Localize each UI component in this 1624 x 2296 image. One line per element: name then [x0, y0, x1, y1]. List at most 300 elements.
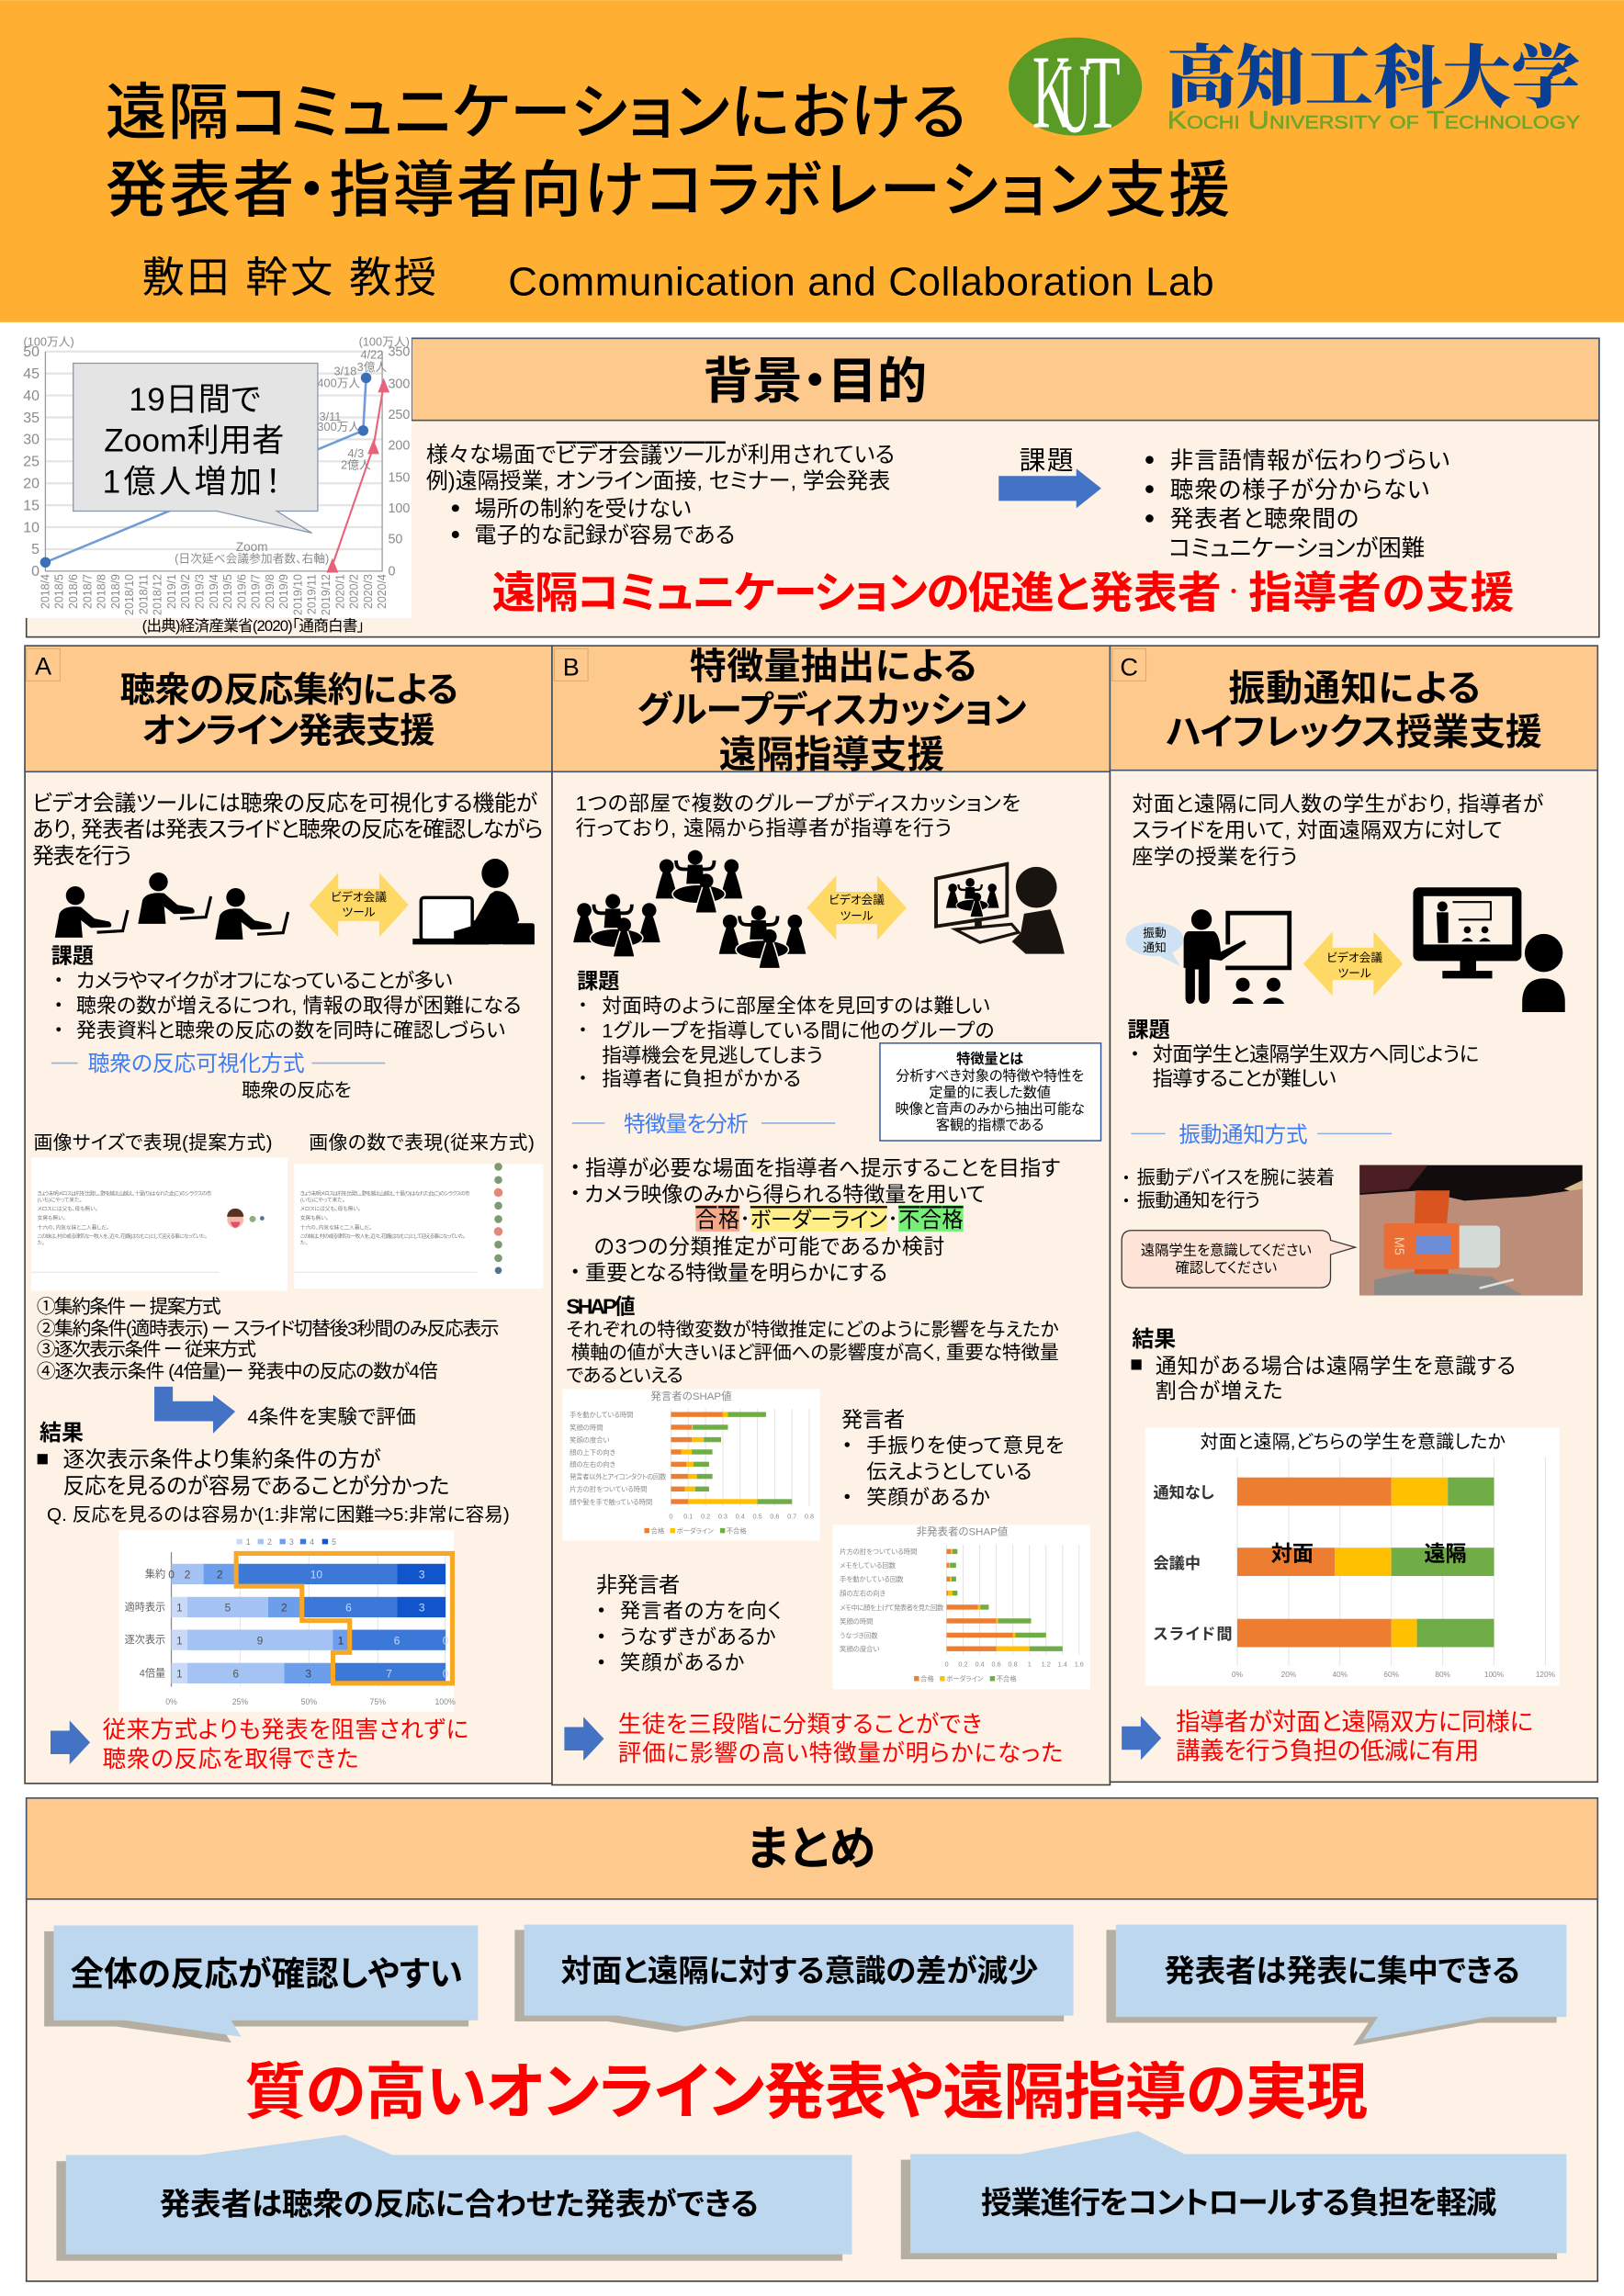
- chart: ease of seeing reactions: 0: [443, 1667, 449, 1680]
- method C: 振動通知を行う: [1137, 1190, 1260, 1211]
- intro B: [576, 792, 1021, 839]
- chart: Zoom usage: 2019/6: [235, 574, 248, 609]
- heading B: グループディスカッション: [637, 690, 1027, 731]
- chart: Zoom usage: 4/3: [348, 446, 364, 460]
- photo: vibration device on wrist: M5: [1391, 1237, 1405, 1255]
- chart: speaker SHAP: 片方の肘をついている時間: [570, 1485, 647, 1493]
- chart: Zoom usage: 2019/12: [320, 574, 333, 615]
- chart: Zoom usage: 300: [388, 377, 410, 392]
- issues B: 対面時のように部屋全体を見回すのは難しい: [602, 994, 990, 1017]
- callout: reduce burden: 授業進行をコントロールする負担を軽減: [981, 2187, 1497, 2221]
- chart: ease of seeing reactions: 4: [310, 1537, 314, 1547]
- chart: non-speaker SHAP: 顔の左右の向き: [840, 1590, 885, 1598]
- aims B: カメラ映像のみから得られる特徴量を用いて: [584, 1182, 986, 1206]
- issues C: 指導することが難しい: [1153, 1067, 1336, 1090]
- chart: ease of seeing reactions: 3: [419, 1602, 425, 1615]
- chart: ease of seeing reactions: 3: [419, 1569, 425, 1581]
- arrow: issues: 課題: [1020, 446, 1074, 476]
- slide: proposed: 女房も無い。: [38, 1214, 65, 1221]
- sub-heading: vibration notification: 振動通知方式: [1179, 1123, 1308, 1147]
- heading C: ハイフレックス授業支援: [1166, 713, 1542, 753]
- chart: Zoom usage: 2億人: [341, 458, 371, 472]
- callout: Zoom users increase: 19日間で: [129, 382, 261, 418]
- chart: ease of seeing reactions: 1: [176, 1667, 183, 1680]
- conclusion A: 従来方式よりも発表を阻害されずに: [103, 1717, 468, 1743]
- icons: audience at laptops: [55, 872, 288, 940]
- issues A: カメラやマイクがオフになっていることが多い: [76, 969, 453, 992]
- chart: Zoom usage: (100万人): [24, 335, 74, 349]
- non-speakers list: 笑顔があるか: [620, 1651, 744, 1674]
- chart: ease of seeing reactions: 6: [345, 1602, 352, 1615]
- text block: video conferencing usage: [426, 443, 895, 548]
- classes highlight: [695, 1205, 964, 1232]
- icon: presenter with laptop: [412, 859, 535, 944]
- chart: Zoom usage: 200: [388, 438, 410, 453]
- chart source: (出典)経済産業省(2020)「通商白書」: [142, 617, 365, 635]
- non-speakers list: 非発言者: [596, 1572, 680, 1596]
- chart: awareness: 0%: [1232, 1671, 1244, 1679]
- chart: Zoom usage: Zoom: [236, 540, 268, 554]
- icon: vibration bubble: 振動: [1143, 926, 1167, 940]
- slide: proposed: [31, 1158, 288, 1291]
- classes highlight: 不合格: [898, 1208, 964, 1232]
- callout: Zoom users increase: [73, 363, 318, 533]
- chart: speaker SHAP: [563, 1390, 820, 1541]
- chart: speaker SHAP: 0.6: [770, 1512, 779, 1520]
- photo: vibration device on wrist: [1359, 1165, 1583, 1295]
- definition box: features: 客観的指標である: [936, 1118, 1044, 1133]
- chart: non-speaker SHAP: 1.6: [1075, 1660, 1084, 1669]
- goal statement: ･: [1228, 580, 1239, 605]
- issues B: 指導機会を見逃してしまう: [602, 1044, 823, 1067]
- chart: speaker SHAP: 0.3: [718, 1512, 727, 1520]
- chart: awareness: 60%: [1383, 1671, 1400, 1679]
- chart: non-speaker SHAP: 非発表者のSHAP値: [917, 1525, 1009, 1537]
- chart: ease of seeing reactions: 1: [176, 1634, 183, 1647]
- heading B: [637, 647, 1027, 776]
- icon: vibration bubble: [1125, 922, 1184, 966]
- icon: video tool arrow: [806, 875, 907, 940]
- conclusion A: [51, 1717, 468, 1773]
- intro B: 行っており, 遠隔から指導者が指導を行う: [576, 816, 952, 839]
- chart: Zoom usage: 2019/4: [208, 574, 220, 609]
- arrow: experiment: [154, 1387, 235, 1434]
- chart: awareness: [1145, 1427, 1560, 1685]
- conditions list: ②集約条件(適時表示) ー スライド切替後3秒間のみ反応表示: [37, 1319, 500, 1340]
- chart: Zoom usage: 250: [388, 408, 410, 422]
- callout: Zoom users increase: 1億人増加！: [103, 464, 281, 500]
- chart: Zoom usage: 2020/2: [347, 574, 360, 609]
- results A: [38, 1421, 510, 1525]
- aims B: 重要となる特徴量を明らかにする: [585, 1260, 887, 1284]
- SHAP description: それぞれの特徴変数が特徴推定にどのように影響を与えたか: [566, 1319, 1059, 1340]
- heading B: 遠隔指導支援: [719, 734, 944, 776]
- conclusion A: 聴衆の反応を取得できた: [103, 1747, 359, 1773]
- key message: 質の高いオンライン発表や遠隔指導の実現: [244, 2058, 1368, 2127]
- goal statement: 遠隔コミュニケーションの促進と: [492, 569, 1089, 618]
- callout: presenter focus: 発表者は発表に集中できる: [1164, 1955, 1520, 1989]
- goal statement: 指導者の支援: [1248, 569, 1514, 618]
- classes highlight: 合格: [695, 1208, 739, 1232]
- definition box: features: [880, 1043, 1101, 1141]
- chart: ease of seeing reactions: 100%: [434, 1697, 456, 1706]
- caption: conventional method: 画像の数で表現(従来方式): [309, 1132, 535, 1154]
- goal statement: [492, 569, 1514, 618]
- chart: speaker SHAP: 発言者のSHAP値: [650, 1390, 732, 1402]
- chart: Zoom usage: (日次延べ会議参加者数、右軸): [175, 552, 329, 566]
- chart: Zoom usage: 2019/7: [250, 574, 263, 609]
- chart: speaker SHAP: ボーダライン: [677, 1526, 714, 1535]
- label C: C: [1120, 653, 1138, 681]
- heading B: 特徴量抽出による: [690, 647, 976, 687]
- arrow: issues: [998, 446, 1101, 508]
- intro C: 対面と遠隔に同人数の学生がおり, 指導者が: [1132, 792, 1544, 816]
- chart: ease of seeing reactions: 1: [338, 1634, 344, 1647]
- chart: Zoom usage: 40: [23, 388, 39, 404]
- chart: Zoom usage: 3/18: [333, 365, 356, 378]
- results C: 通知がある場合は遠隔学生を意識する: [1156, 1354, 1516, 1378]
- chart: non-speaker SHAP: 手を動かしている回数: [840, 1575, 904, 1583]
- chart: ease of seeing reactions: 6: [394, 1634, 400, 1647]
- chart: ease of seeing reactions: 0: [443, 1634, 449, 1647]
- callout: presenter focus: [1106, 1925, 1566, 2045]
- chart: non-speaker SHAP: メモをしている回数: [840, 1561, 897, 1570]
- chart: ease of seeing reactions: 逐次表示: [125, 1634, 165, 1646]
- non-speakers list: うなずきがあるか: [620, 1626, 776, 1649]
- chart: Zoom usage: 2018/5: [53, 574, 66, 609]
- intro C: 座学の授業を行う: [1132, 844, 1297, 868]
- slide: proposed: 十六の、内気な妹と二人暮しだ。: [38, 1223, 109, 1231]
- goal statement: 発表者: [1089, 569, 1222, 618]
- intro C: スライドを用いて, 対面遠隔双方に対して: [1132, 818, 1503, 842]
- conclusion C: 指導者が対面と遠隔双方に同様に: [1176, 1708, 1533, 1736]
- chart: Zoom usage: 2019/1: [165, 574, 178, 609]
- icon: video tool arrow: ツール: [840, 909, 874, 923]
- issues B: 課題: [577, 969, 619, 993]
- chart: Zoom usage: 2020/4: [376, 574, 389, 609]
- chart: Zoom usage: 2018/10: [123, 574, 136, 615]
- chart: ease of seeing reactions: 3: [305, 1667, 311, 1680]
- slide: proposed: この妹は、村の或る律気な一牧人を、近々、花婿(はなむこ)として迎える事になっていた。: [37, 1232, 208, 1240]
- chart: Zoom usage: 50: [23, 344, 39, 360]
- label A: [27, 648, 60, 681]
- chart: Zoom usage: 350: [388, 344, 410, 359]
- chart: Zoom usage: 0: [388, 565, 395, 580]
- chart: speaker SHAP: 0.8: [805, 1512, 814, 1520]
- definition box: features: 定量的に表した数値: [929, 1086, 1051, 1101]
- university name: Kochi University of Technology: [1167, 106, 1580, 134]
- conclusion C: [1122, 1708, 1533, 1765]
- classes highlight: ボーダーライン: [750, 1208, 887, 1232]
- chart: awareness: スライド間: [1153, 1625, 1233, 1643]
- chart: ease of seeing reactions: 集約: [145, 1567, 165, 1580]
- aims B: 指導が必要な場面を指導者へ提示することを目指す: [585, 1155, 1060, 1179]
- chart: non-speaker SHAP: 1.4: [1058, 1660, 1067, 1669]
- chart: non-speaker SHAP: 1: [1028, 1660, 1032, 1669]
- chart: non-speaker SHAP: 合格: [920, 1675, 934, 1683]
- author name: 敷田 幹文 教授: [142, 253, 436, 301]
- heading C: 振動通知による: [1229, 669, 1481, 709]
- chart: ease of seeing reactions: 1: [176, 1602, 183, 1615]
- chart: ease of seeing reactions: 2: [217, 1569, 223, 1581]
- slide: conventional: [294, 1163, 543, 1289]
- chart: Zoom usage: 5: [31, 542, 39, 557]
- speech bubble: notification message: 確認してください: [1175, 1261, 1278, 1277]
- chart: Zoom usage: 2018/12: [152, 574, 164, 615]
- text block: video conferencing usage: 例)遠隔授業, オンライン面接, セミナー, 学会発表: [426, 469, 890, 494]
- results A: 反応を見るのが容易であることが分かった: [63, 1474, 449, 1498]
- sub-heading: feature analysis: 特徴量を分析: [624, 1112, 749, 1136]
- chart: Zoom usage: 2018/7: [81, 574, 94, 609]
- chart: Zoom usage: 2018/8: [95, 574, 107, 609]
- issues B: 1グループを指導している間に他のグループの: [602, 1019, 994, 1041]
- issues C: 対面学生と遠隔学生双方へ同じように: [1153, 1043, 1479, 1066]
- method C: 振動デバイスを腕に装着: [1137, 1167, 1335, 1188]
- conditions list: ④逐次表示条件 (4倍量)ー 発表中の反応の数が4倍: [37, 1361, 438, 1382]
- slide: conventional: た。: [300, 1240, 308, 1246]
- icon: video tool arrow: ビデオ会議: [331, 890, 387, 904]
- chart: Zoom usage: 2019/8: [264, 574, 276, 609]
- conclusion B: 評価に影響の高い特徴量が明らかになった: [618, 1741, 1063, 1767]
- conclusion C: 講義を行う負担の低減に有用: [1176, 1738, 1479, 1765]
- speakers list: 手振りを使って意見を: [866, 1435, 1065, 1458]
- chart: ease of seeing reactions: 2: [185, 1569, 191, 1581]
- chart: awareness: 対面: [1271, 1541, 1314, 1565]
- slide: proposed: メロスには父も、母も無い。: [37, 1205, 98, 1212]
- definition box: features: 分析すべき対象の特徴や特性を: [896, 1069, 1084, 1085]
- panel: background and purpose: [23, 331, 1599, 637]
- icons: discussion groups: [573, 850, 806, 969]
- heading A: オンライン発表支援: [142, 711, 434, 750]
- chart: Zoom usage: (100万人): [359, 335, 410, 349]
- chart: awareness: 遠隔: [1424, 1541, 1467, 1565]
- chart: Zoom usage: 25: [23, 455, 39, 470]
- chart: non-speaker SHAP: ボーダライン: [946, 1675, 984, 1683]
- chart: Zoom usage: 4/22: [361, 347, 383, 361]
- list: issues: 非言語情報が伝わりづらい: [1170, 448, 1449, 474]
- chart: Zoom usage: 400万人: [317, 376, 360, 389]
- chart: non-speaker SHAP: 笑顔の時間: [840, 1617, 874, 1626]
- heading A: 聴衆の反応集約による: [120, 670, 458, 710]
- icon: vibration bubble: 通知: [1143, 940, 1167, 954]
- icon: video tool arrow: ビデオ会議: [1326, 951, 1382, 964]
- title: [106, 79, 1230, 225]
- text: reactions: 聴衆の反応を: [242, 1080, 352, 1101]
- chart: Zoom usage: 2019/9: [277, 574, 290, 609]
- issues A: 課題: [51, 944, 94, 968]
- chart: speaker SHAP: 0.5: [752, 1512, 762, 1520]
- issues C: 課題: [1128, 1018, 1170, 1041]
- label A: A: [35, 652, 52, 681]
- chart: Zoom usage: 300万人: [317, 420, 360, 433]
- list: issues: 発表者と聴衆間の: [1170, 507, 1359, 533]
- chart: ease of seeing reactions: 3: [289, 1537, 294, 1547]
- chart: Zoom usage: 100: [388, 501, 410, 516]
- label B: [554, 648, 588, 681]
- aims B: の3つの分類推定が可能であるか検討: [594, 1234, 944, 1258]
- chart: speaker SHAP: 笑顔の時間: [570, 1424, 603, 1432]
- definition box: features: 特徴量とは: [956, 1051, 1023, 1067]
- chart: Zoom usage: 10: [23, 520, 39, 535]
- header banner: [0, 0, 1624, 322]
- chart: speaker SHAP: 0.2: [701, 1512, 710, 1520]
- chart: awareness: 100%: [1484, 1671, 1505, 1679]
- chart: ease of seeing reactions: 5: [332, 1537, 336, 1547]
- speech bubble: notification message: 遠隔学生を意識してください: [1141, 1244, 1312, 1259]
- icon: remote student at monitor: [1413, 887, 1565, 1012]
- issues B: [577, 969, 994, 1090]
- results A: Q. 反応を見るのは容易か(1:非常に困難⇒5:非常に容易): [47, 1504, 510, 1525]
- issues A: 発表資料と聴衆の反応の数を同時に確認しづらい: [76, 1019, 505, 1041]
- chart: Zoom usage: 2018/4: [39, 574, 51, 609]
- chart: speaker SHAP: 笑顔の度合い: [570, 1435, 609, 1444]
- intro A: ビデオ会議ツールには聴衆の反応を可視化する機能が: [32, 791, 538, 816]
- intro C: [1132, 792, 1544, 868]
- results A: 逐次表示条件より集約条件の方が: [63, 1447, 380, 1471]
- issues A: 聴衆の数が増えるにつれ, 情報の取得が困難になる: [76, 994, 522, 1017]
- chart: Zoom usage: 2019/11: [306, 574, 319, 614]
- conclusion B: 生徒を三段階に分類することができ: [618, 1712, 982, 1738]
- heading: summary: まとめ: [747, 1822, 875, 1874]
- chart: ease of seeing reactions: 0%: [165, 1697, 177, 1706]
- slide: conventional: きょう未明メロスは村を出発し、野を越え山越え、十里(り)はなれた此(こ)のシラクスの市: [300, 1190, 470, 1198]
- panel A: [25, 646, 552, 1784]
- chart: ease of seeing reactions: 25%: [232, 1697, 248, 1706]
- panel B: [552, 646, 1110, 1784]
- aims B: [573, 1155, 1060, 1284]
- chart: non-speaker SHAP: メモ中に顔を上げて発表者を見た回数: [840, 1604, 944, 1612]
- non-speakers list: 発言者の方を向く: [620, 1600, 782, 1623]
- SHAP description: 横軸の値が大きいほど評価への影響度が高く, 重要な特徴量: [571, 1342, 1059, 1363]
- icon: video tool arrow: ツール: [1338, 966, 1371, 980]
- chart: ease of seeing reactions: 9: [257, 1634, 264, 1647]
- icon: teacher at board: [1184, 909, 1290, 1004]
- chart: Zoom usage: 2019/2: [179, 574, 192, 609]
- list: issues: コミュニケーションが困難: [1168, 536, 1425, 562]
- text block: video conferencing usage: 様々な場面でビデオ会議ツールが利用されている: [426, 443, 895, 467]
- results C: [1132, 1327, 1516, 1402]
- chart: Zoom usage: 2018/6: [67, 574, 80, 609]
- SHAP description: [566, 1294, 1059, 1386]
- speech bubble: notification message: [1122, 1231, 1355, 1288]
- chart: Zoom usage: 2019/3: [193, 574, 206, 609]
- conditions list: ③逐次表示条件 ー 従来方式: [37, 1339, 256, 1360]
- icon: video tool arrow: ツール: [342, 906, 376, 919]
- chart: ease of seeing reactions: 7: [386, 1667, 392, 1680]
- chart: awareness: 通知なし: [1153, 1483, 1214, 1502]
- icon: remote instructor: [936, 864, 1065, 954]
- classes highlight: ･: [888, 1210, 897, 1231]
- intro A: 発表を行う: [32, 844, 131, 869]
- text block: video conferencing usage: 電子的な記録が容易である: [475, 523, 735, 548]
- callout: Zoom users increase: Zoom利用者: [104, 423, 284, 459]
- chart: ease of seeing reactions: 0: [168, 1569, 175, 1581]
- conditions list: ①集約条件 ー 提案方式: [37, 1297, 221, 1318]
- chart: Zoom usage: 3/11: [320, 410, 341, 423]
- conclusion B: [564, 1712, 1063, 1767]
- chart: speaker SHAP: 顔の左右の向き: [570, 1460, 615, 1469]
- chart: non-speaker SHAP: 0.4: [975, 1660, 985, 1669]
- chart: speaker SHAP: 顔や髪を手で触っている時間: [570, 1498, 652, 1506]
- results C: 結果: [1132, 1327, 1176, 1352]
- results A: 結果: [39, 1421, 84, 1446]
- chart: non-speaker SHAP: 0.8: [1008, 1660, 1018, 1669]
- callout: overall reaction: 全体の反応が確認しやすい: [71, 1955, 463, 1993]
- intro A: [32, 791, 543, 869]
- chart: ease of seeing reactions: 10: [310, 1569, 322, 1581]
- lab name: Communication and Collaboration Lab: [508, 259, 1214, 304]
- chart: speaker SHAP: 0.7: [787, 1512, 796, 1520]
- chart: Zoom usage: 50: [388, 533, 402, 547]
- chart: non-speaker SHAP: 不合格: [997, 1675, 1017, 1683]
- label C: [1112, 648, 1145, 681]
- icon: video tool arrow: [1303, 931, 1403, 996]
- highlight outline: [236, 1553, 452, 1683]
- speakers list: 発言者: [841, 1407, 905, 1431]
- chart: non-speaker SHAP: うなづき回数: [840, 1631, 878, 1639]
- slide: conventional: 女房も無い。: [300, 1214, 329, 1221]
- chart: Zoom usage: 2020/3: [362, 574, 375, 609]
- chart: Zoom usage: 2018/9: [109, 574, 122, 609]
- chart: ease of seeing reactions: 2: [267, 1537, 272, 1547]
- chart: non-speaker SHAP: 0.2: [958, 1660, 968, 1669]
- chart: awareness: 40%: [1332, 1671, 1348, 1679]
- chart: non-speaker SHAP: 1.2: [1042, 1660, 1051, 1669]
- chart: speaker SHAP: 0.1: [683, 1512, 693, 1520]
- chart: awareness: 対面と遠隔,どちらの学生を意識したか: [1200, 1432, 1506, 1453]
- icon: video tool arrow: ビデオ会議: [829, 893, 885, 906]
- chart: non-speaker SHAP: 笑顔の度合い: [840, 1645, 879, 1653]
- chart: Zoom usage: 0: [31, 564, 39, 580]
- chart: Zoom usage: 2019/10: [291, 574, 304, 615]
- chart: Zoom usage: 20: [23, 477, 39, 492]
- heading C: [1166, 669, 1542, 753]
- chart: ease of seeing reactions: 2: [281, 1602, 288, 1615]
- chart: speaker SHAP: 発言者以外とアイコンタクトの回数: [570, 1472, 667, 1480]
- slide: conventional: メロスには父も、母も無い。: [299, 1205, 361, 1212]
- slide: conventional: (いち)にやって来た。: [300, 1196, 345, 1203]
- SHAP description: であるといえる: [566, 1365, 683, 1386]
- chart: Zoom usage: 2019/5: [221, 574, 234, 609]
- logo: university emblem: T: [1085, 33, 1121, 150]
- chart: speaker SHAP: 0: [669, 1512, 673, 1520]
- logo: university emblem: K: [1032, 33, 1072, 150]
- heading A: [120, 670, 458, 750]
- callout: awareness gap: 対面と遠隔に対する意識の差が減少: [561, 1954, 1038, 1989]
- chart: speaker SHAP: 手を動かしている時間: [570, 1411, 634, 1419]
- title: 発表者・指導者向けコラボレーション支援: [106, 156, 1230, 225]
- slide: conventional: 十六の、内気な妹と二人暮しだ。: [300, 1223, 372, 1231]
- chart: speaker SHAP: 合格: [651, 1526, 665, 1535]
- SHAP description: SHAP値: [566, 1294, 636, 1318]
- chart: ease of seeing reactions: 75%: [370, 1697, 386, 1706]
- heading: background and purpose: 背景・目的: [703, 355, 927, 410]
- chart: Zoom usage: [23, 331, 412, 618]
- slide: proposed: た。: [37, 1240, 45, 1246]
- chart: Zoom usage: 150: [388, 471, 410, 486]
- chart: speaker SHAP: 不合格: [727, 1526, 747, 1535]
- method C: [1124, 1167, 1335, 1211]
- chart: ease of seeing reactions: 5: [225, 1602, 231, 1615]
- intro A: あり, 発表者は発表スライドと聴衆の反応を確認しながら: [32, 817, 543, 842]
- chart: ease of seeing reactions: 適時表示: [125, 1601, 165, 1614]
- chart: non-speaker SHAP: [832, 1525, 1090, 1689]
- chart: ease of seeing reactions: 6: [232, 1667, 239, 1680]
- intro B: 1つの部屋で複数のグループがディスカッションを: [576, 792, 1021, 815]
- speakers list: 伝えようとしている: [866, 1460, 1032, 1483]
- callout: awareness gap: [514, 1925, 1074, 2032]
- chart: awareness: 120%: [1536, 1671, 1556, 1679]
